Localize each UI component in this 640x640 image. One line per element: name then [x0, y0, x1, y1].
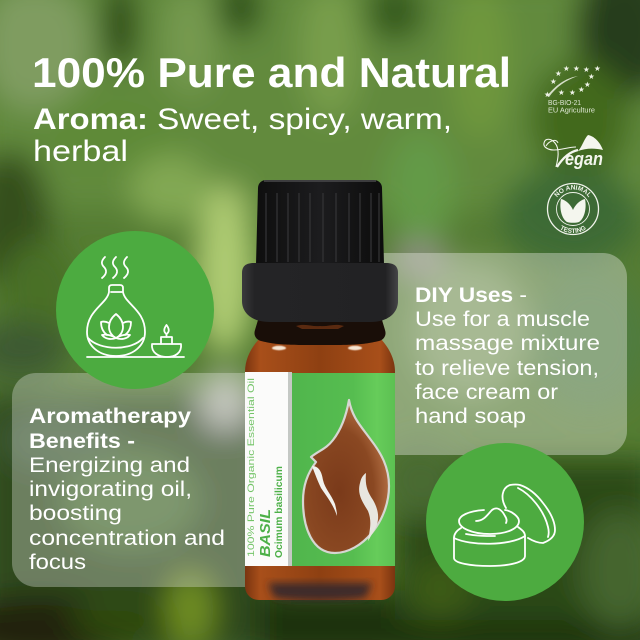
drop icon — [303, 400, 389, 553]
aroma text — [33, 103, 452, 168]
badge: vegan — [544, 135, 603, 169]
icon circle: aroma diffuser — [56, 231, 214, 389]
text block: DIY uses: hand soap — [415, 405, 526, 428]
bottle neck — [254, 320, 386, 345]
text block: aromatherapy benefits: Energizing and — [29, 454, 190, 477]
aroma text: herbal — [33, 135, 128, 168]
text block: aromatherapy benefits: focus — [29, 551, 86, 574]
text block: DIY uses: to relieve tension, — [415, 357, 599, 380]
icon circle: cream jar — [426, 443, 584, 601]
badge: vegan: egan — [565, 149, 603, 169]
badge: EU organic leaf — [544, 64, 601, 114]
aroma text: Aroma: — [33, 103, 148, 136]
badge: EU organic leaf: ★★★★★★★★★★★★ — [544, 64, 601, 99]
text block: DIY uses: Use for a muscle — [415, 308, 590, 331]
text block: DIY uses: DIY Uses - — [415, 284, 527, 307]
badge: no animal testing — [546, 182, 600, 236]
badge caption: BG-BIO-21 — [548, 100, 581, 107]
text block: DIY uses: face cream or — [415, 381, 558, 404]
shoulder highlights — [272, 346, 362, 350]
aroma text: Sweet, spicy, warm, — [157, 103, 452, 136]
label — [245, 372, 395, 566]
text block: DIY uses — [415, 284, 600, 428]
text block: aromatherapy benefits: boosting — [29, 502, 122, 525]
bottle cap — [242, 180, 398, 322]
text block: aromatherapy benefits: Benefits - — [29, 430, 135, 453]
text block: aromatherapy benefits — [29, 405, 225, 574]
title: 100% Pure and Natural — [32, 49, 511, 96]
badge: EU organic leaf: EU Agriculture — [548, 108, 595, 114]
bottle base shadow — [268, 583, 372, 600]
bottle glass body — [245, 336, 395, 600]
bottle — [242, 180, 398, 600]
label text: 100% Pure Organic Essential Oil — [246, 378, 257, 557]
text block: aromatherapy benefits: concentration and — [29, 527, 225, 550]
label: Ocimum basilicum — [274, 466, 285, 558]
panel: aromatherapy benefits — [12, 373, 280, 587]
label: BASIL — [257, 509, 274, 557]
text block: DIY uses: massage mixture — [415, 332, 600, 355]
badge: no animal testing: TESTING — [561, 225, 586, 233]
text block: aromatherapy benefits: Aromatherapy — [29, 405, 191, 428]
text block: aromatherapy benefits: invigorating oil, — [29, 478, 192, 501]
badge: no animal testing: NO ANIMAL — [554, 185, 590, 198]
panel: DIY uses — [360, 253, 627, 455]
